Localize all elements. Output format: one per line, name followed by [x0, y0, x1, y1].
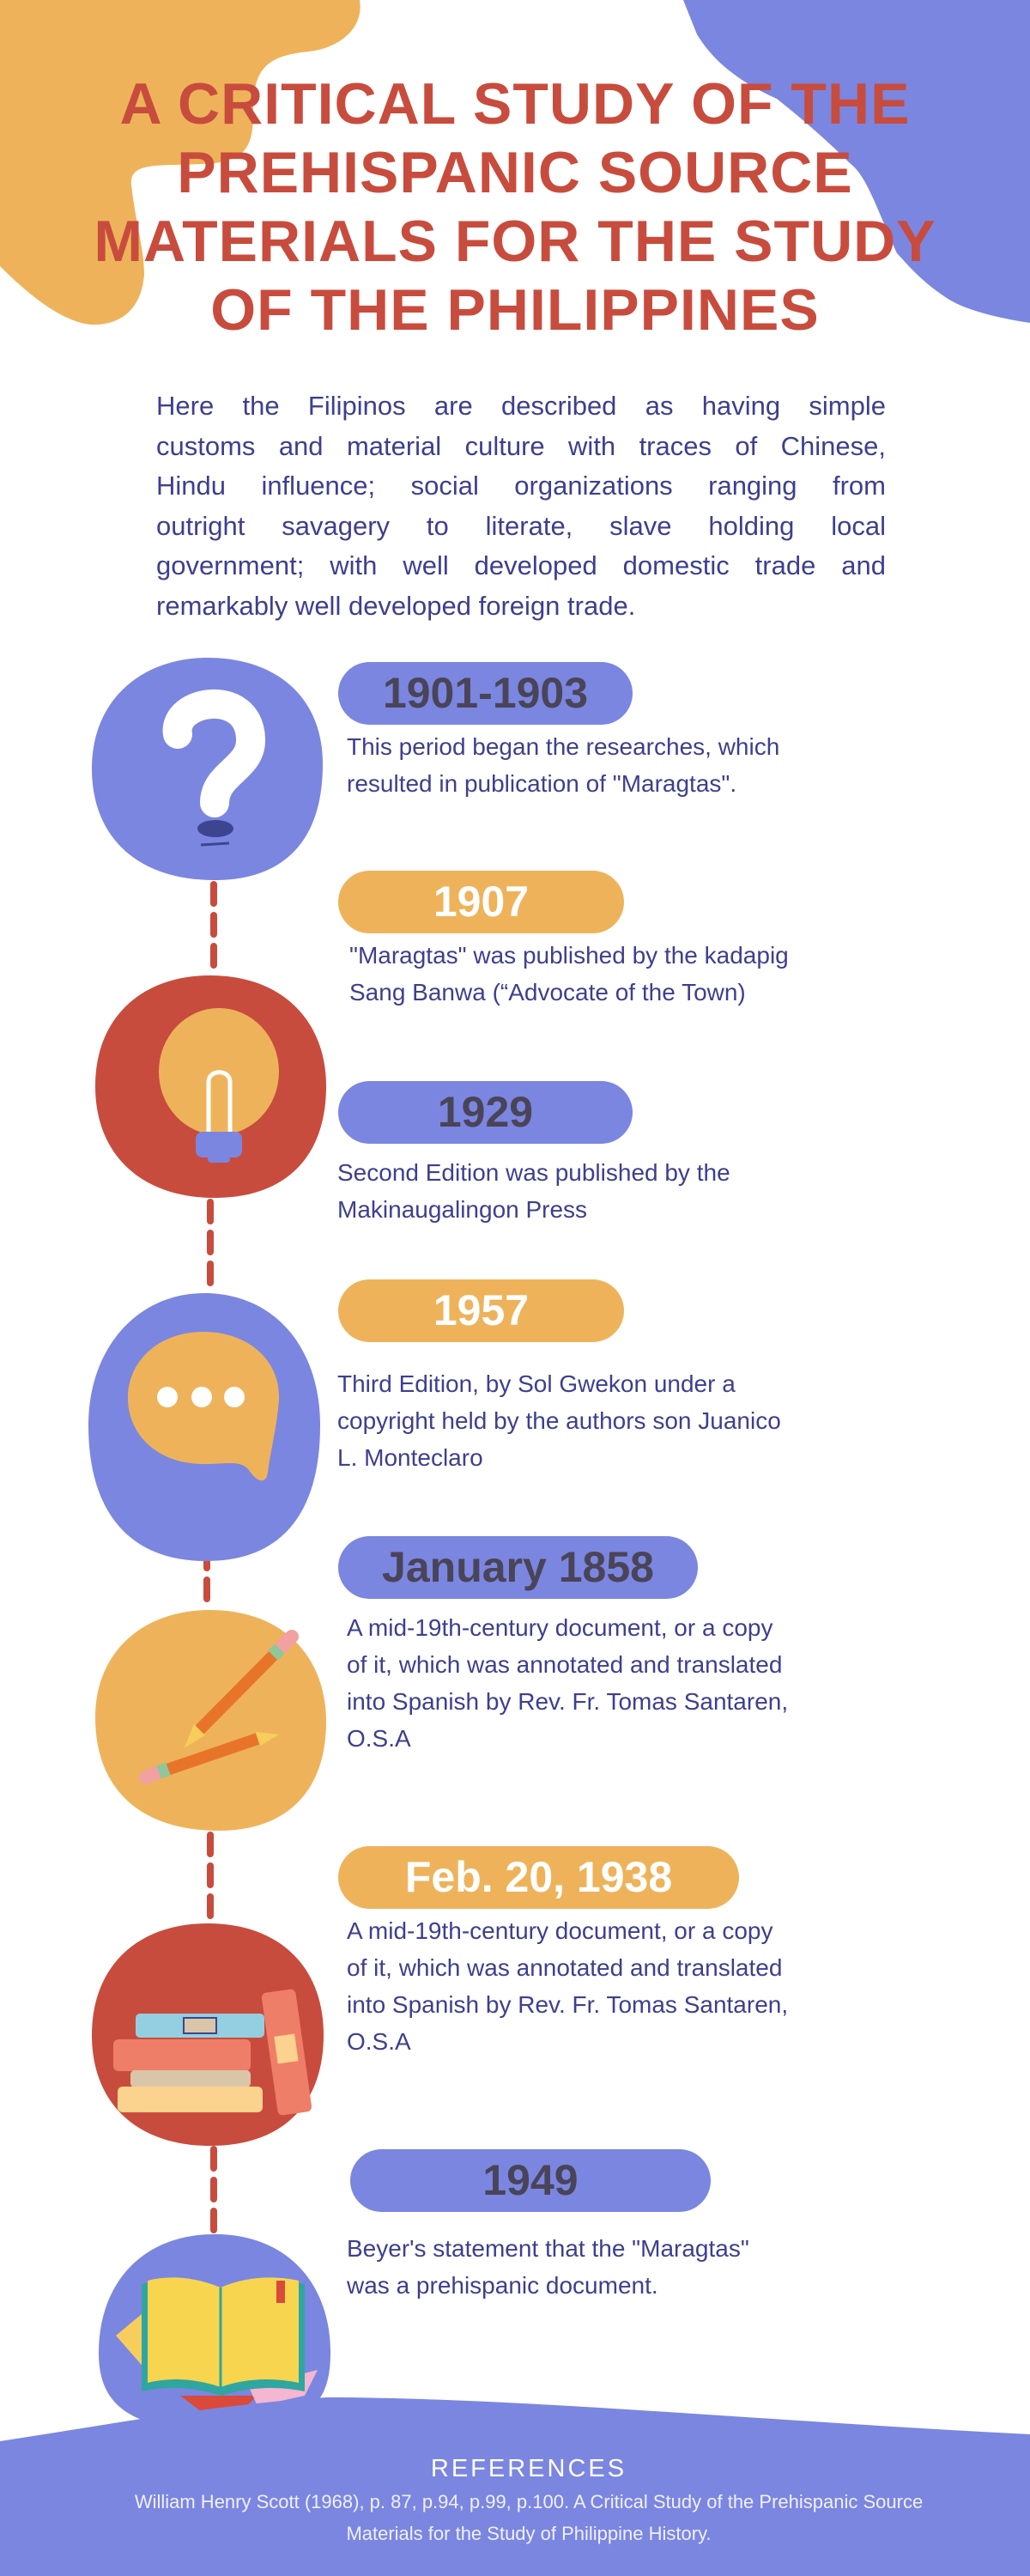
text: 1957: L. Monteclaro: [337, 1444, 483, 1471]
intro paragraph: [156, 391, 886, 621]
text: 1957: Third Edition, by Sol Gwekon under a: [337, 1370, 736, 1397]
pill: 1957: 1957: [433, 1286, 529, 1334]
pill: Feb. 20, 1938: Feb. 20, 1938: [405, 1853, 672, 1901]
pill: 1907: 1907: [433, 878, 529, 926]
text: Feb. 20, 1938: A mid-19th-century document, or a copy: [347, 1917, 772, 1944]
text: January 1858: O.S.A: [347, 1725, 411, 1752]
icon: speech bubble circle: [88, 1293, 320, 1561]
text: January 1858: [347, 1614, 788, 1752]
intro paragraph: Hindu influence; social organizations ranging from: [156, 471, 886, 501]
pill: 1949: [350, 2149, 711, 2212]
intro paragraph: Here the Filipinos are described as having simple: [156, 391, 886, 421]
footer wave: [0, 2397, 1030, 2576]
text: 1907: Sang Banwa (“Advocate of the Town): [349, 979, 746, 1005]
title: MATERIALS FOR THE STUDY: [94, 209, 936, 274]
text: 1929: [337, 1159, 730, 1223]
intro paragraph: government; with well developed domestic trade and: [156, 550, 886, 580]
text: Feb. 20, 1938: [347, 1917, 788, 2055]
text: 1907: [349, 942, 789, 1005]
pill: 1901-1903: 1901-1903: [383, 669, 588, 717]
text: 1949: Beyer's statement that the "Maragtas": [347, 2235, 749, 2262]
icon: light bulb circle: [95, 975, 326, 1198]
pill: 1907: [338, 871, 624, 933]
text: Feb. 20, 1938: of it, which was annotated and translated: [347, 1954, 782, 1981]
text: 1949: [347, 2235, 749, 2299]
references: REFERENCES: [431, 2455, 627, 2482]
icon: pencils circle: [95, 1610, 326, 1831]
intro paragraph: outright savagery to literate, slave holding local: [156, 511, 886, 541]
title: PREHISPANIC SOURCE: [177, 140, 853, 205]
pill: 1901-1903: [338, 662, 633, 725]
pill: 1949: 1949: [482, 2156, 579, 2204]
pill: January 1858: [338, 1536, 698, 1599]
text: 1957: copyright held by the authors son Juanico: [337, 1407, 781, 1434]
text: January 1858: into Spanish by Rev. Fr. Tomas Santaren,: [347, 1688, 788, 1715]
text: 1901-1903: [347, 733, 779, 797]
text: Feb. 20, 1938: O.S.A: [347, 2028, 411, 2055]
title: A CRITICAL STUDY OF THE: [120, 71, 910, 137]
title: OF THE PHILIPPINES: [210, 277, 820, 343]
text: 1929: Second Edition was published by the: [337, 1159, 730, 1186]
intro paragraph: customs and material culture with traces of Chinese,: [156, 431, 886, 461]
pill: 1929: 1929: [438, 1088, 533, 1136]
references: William Henry Scott (1968), p. 87, p.94, p.99, p.100. A Critical Study of the Prehispanic Source: [135, 2491, 923, 2512]
dashes: [207, 884, 214, 2234]
pill: January 1858: January 1858: [382, 1543, 654, 1591]
references: [135, 2455, 923, 2544]
text: January 1858: of it, which was annotated and translated: [347, 1651, 782, 1678]
text: 1929: Makinaugalingon Press: [337, 1196, 587, 1223]
text: January 1858: A mid-19th-century document, or a copy: [347, 1614, 772, 1641]
title: [94, 71, 936, 343]
icon: books stack circle: [92, 1923, 324, 2146]
text: Feb. 20, 1938: into Spanish by Rev. Fr. Tomas Santaren,: [347, 1991, 788, 2018]
text: 1957: [337, 1370, 781, 1471]
pill: 1957: [338, 1279, 624, 1342]
text: 1901-1903: resulted in publication of "Maragtas".: [347, 770, 736, 797]
pill: 1929: [338, 1081, 633, 1144]
pill: Feb. 20, 1938: [338, 1846, 739, 1909]
blob: blue top-right: [683, 0, 1030, 323]
text: 1901-1903: This period began the researches, which: [347, 733, 779, 760]
blob: orange top-left: [0, 0, 360, 325]
text: 1949: was a prehispanic document.: [347, 2272, 658, 2299]
icon: question mark circle: [92, 658, 323, 880]
intro paragraph: remarkably well developed foreign trade.: [156, 591, 635, 621]
icon: open book circle: [99, 2234, 330, 2420]
text: 1907: "Maragtas" was published by the kadapig: [349, 942, 789, 969]
references: Materials for the Study of Philippine History.: [346, 2523, 712, 2544]
